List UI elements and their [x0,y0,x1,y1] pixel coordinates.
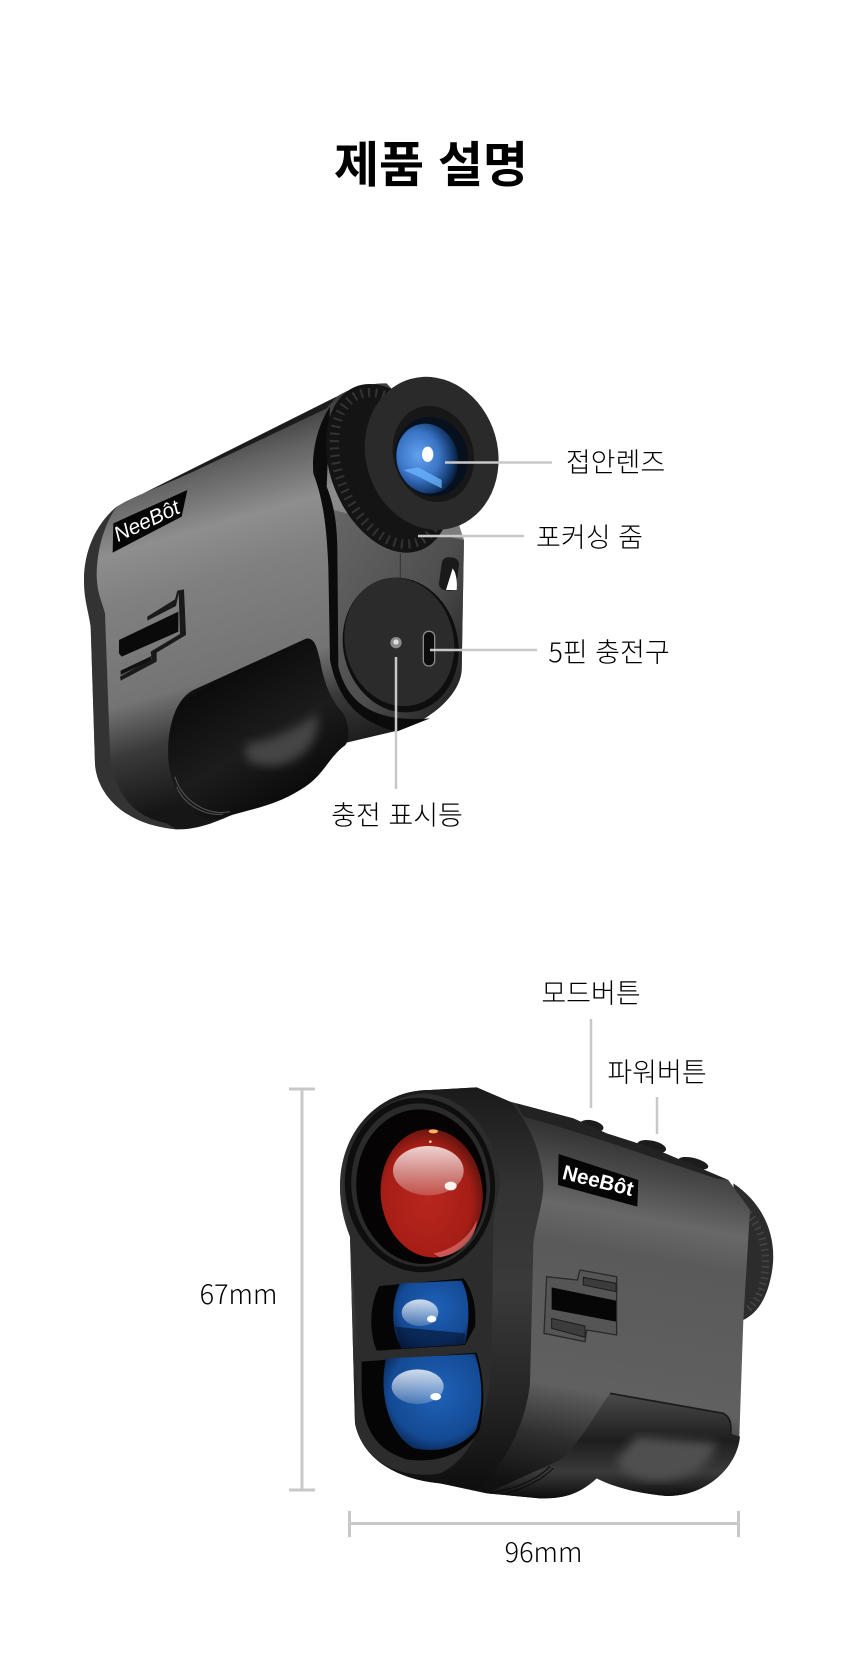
label: eyepiece lens: 접안렌즈 [566,441,665,480]
focus ring [302,365,474,571]
label: height: 67mm [200,1273,277,1312]
top dark edge [517,1103,728,1180]
eyecup [347,361,516,546]
receiver lens: blue small [371,1278,475,1351]
objective lens: red [338,1091,502,1279]
device: rangefinder front view [338,1087,773,1498]
leader: power button [656,1097,658,1134]
eyepiece lens [388,416,467,501]
charge LED [390,637,402,648]
USB port [423,631,435,666]
leader: charging port [430,649,537,651]
width dimension [350,1511,738,1537]
texture mark [119,589,186,681]
label: charging port: 5핀 충전구 [548,631,670,670]
label: width: 96mm [505,1531,582,1570]
front bezel [313,407,430,732]
label: charge indicator: 충전 표시등 [331,794,463,833]
grip seam [490,1467,553,1493]
eyepiece behind [733,1183,773,1320]
emitter lens: blue large [362,1353,483,1460]
front face [343,1093,500,1475]
leader: focusing zoom [418,535,524,537]
title: 제품 설명 [334,126,528,197]
body [340,1087,750,1498]
grip edge [175,777,230,814]
label: power button: 파워버튼 [607,1051,707,1090]
grip [168,638,348,819]
battery cap [329,565,473,725]
label: focusing zoom: 포커싱 줌 [536,516,643,555]
logo badge: NeeBôt [560,1161,636,1201]
grip [487,1393,740,1498]
front housing band [340,1087,543,1490]
device: rangefinder rear view [84,361,516,829]
texture mark [544,1270,617,1342]
front panel [333,510,464,730]
leader: mode button [590,1019,592,1108]
logo badge: NeeBôt [110,496,185,547]
top buttons [579,1118,709,1172]
height dimension [289,1089,315,1490]
leader: charge indicator [395,657,397,789]
label: mode button: 모드버튼 [541,972,641,1011]
leader: eyepiece lens [445,461,552,464]
body [84,383,464,829]
strap slot [438,556,460,592]
